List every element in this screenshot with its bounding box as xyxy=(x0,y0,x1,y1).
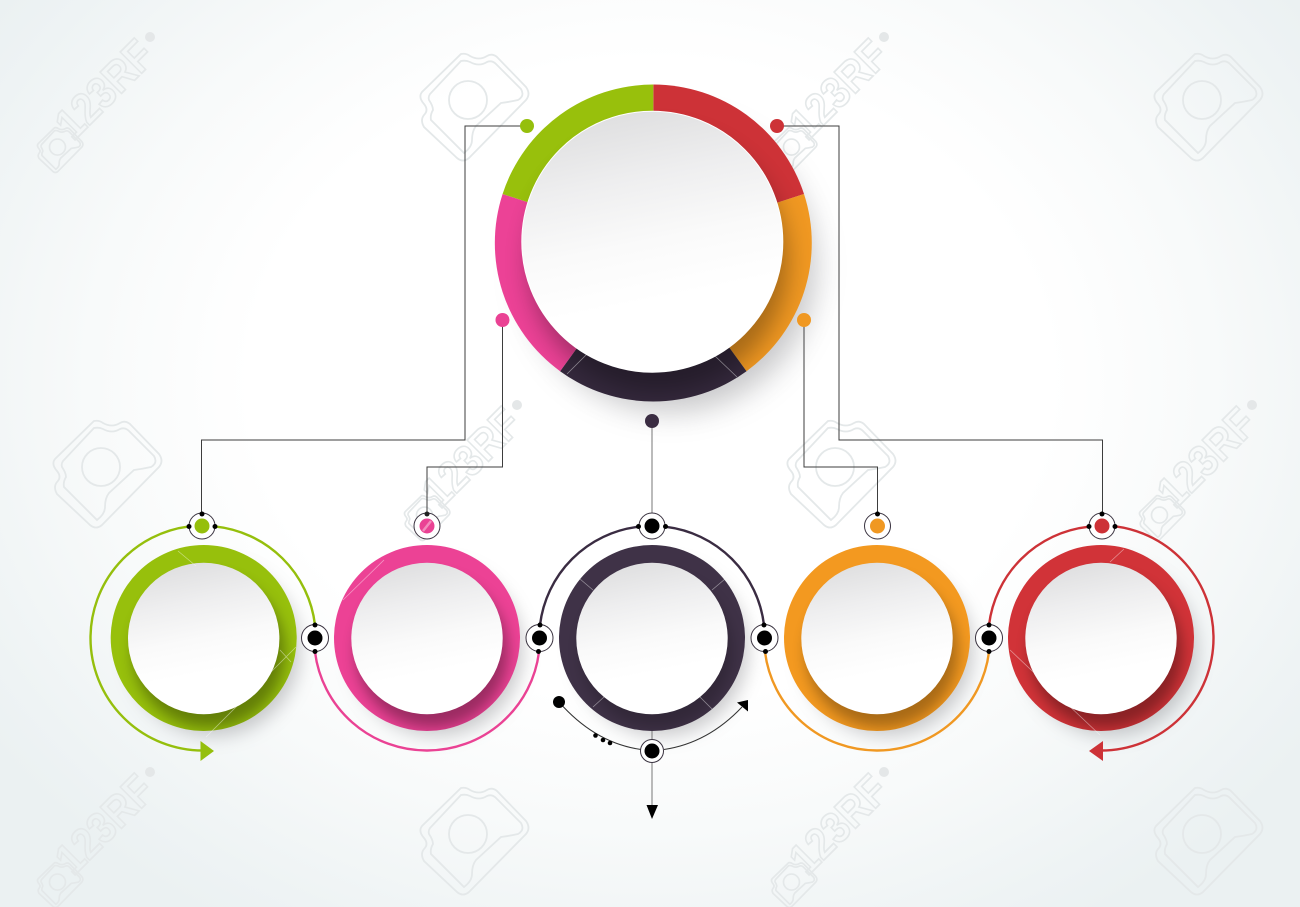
dot: green xyxy=(520,119,534,133)
watermark: 123RF bottom centre: 123RF xyxy=(780,766,898,884)
connector dots on main circle xyxy=(496,119,811,428)
watermark: 123RF bottom left xyxy=(37,766,164,907)
main circle segmented ring xyxy=(495,84,812,401)
main circle paper disc shadow xyxy=(528,132,788,392)
node: green top xyxy=(186,512,218,539)
sub circle: green xyxy=(111,545,297,737)
sub circle: pink xyxy=(334,545,520,731)
watermark: 123RF middle right xyxy=(1139,399,1266,540)
watermark: 123RF middle left xyxy=(404,399,531,540)
segment: pink xyxy=(495,194,653,371)
main circle paper disc xyxy=(522,111,783,372)
arc: dark xyxy=(540,527,764,625)
watermark: 123RF bottom left: 123RF xyxy=(46,766,164,884)
watermark: 123RF middle left: 123RF xyxy=(413,399,531,517)
arc: pink xyxy=(315,652,539,751)
watermark: 123RF top centre: 123RF xyxy=(780,31,898,149)
segment: orange xyxy=(653,194,812,371)
watermark: 123RF top left: 123RF xyxy=(46,31,164,149)
arc: red with arrow xyxy=(989,526,1214,761)
arc: green with arrow xyxy=(90,526,315,761)
lower dial with arrows under dark circle xyxy=(553,696,748,819)
node: orange top xyxy=(864,512,890,539)
segment: green xyxy=(503,84,653,243)
dot: orange xyxy=(797,313,811,327)
sub circle shadows xyxy=(128,564,1197,736)
dot: red xyxy=(770,119,784,133)
node: side junction 1 xyxy=(302,622,328,654)
watermark: 123RF bottom centre xyxy=(771,766,898,907)
node: pink top xyxy=(414,512,440,539)
connector lines from main circle to sub circles xyxy=(202,126,1102,514)
node: side junction 3 xyxy=(751,622,778,654)
watermark: 123RF top left xyxy=(37,31,164,172)
main circle shadow xyxy=(524,120,816,412)
node: side junction 2 xyxy=(526,622,553,654)
segment: dark xyxy=(560,243,746,401)
node: red top xyxy=(1086,512,1118,539)
segment: red xyxy=(653,84,804,243)
watermark: 123RF top centre xyxy=(771,31,898,172)
arc: orange xyxy=(765,652,989,751)
node: dark top xyxy=(636,513,668,539)
sub circle: dark xyxy=(559,545,745,731)
sub circle: orange xyxy=(784,545,970,731)
dot: dark xyxy=(645,414,659,428)
watermark: 123RF middle right: 123RF xyxy=(1148,399,1266,517)
node: side junction 4 xyxy=(976,622,1002,654)
artefact lines on dark segment xyxy=(567,354,737,377)
dot: pink xyxy=(496,313,510,327)
sub circle: red xyxy=(1008,545,1194,735)
